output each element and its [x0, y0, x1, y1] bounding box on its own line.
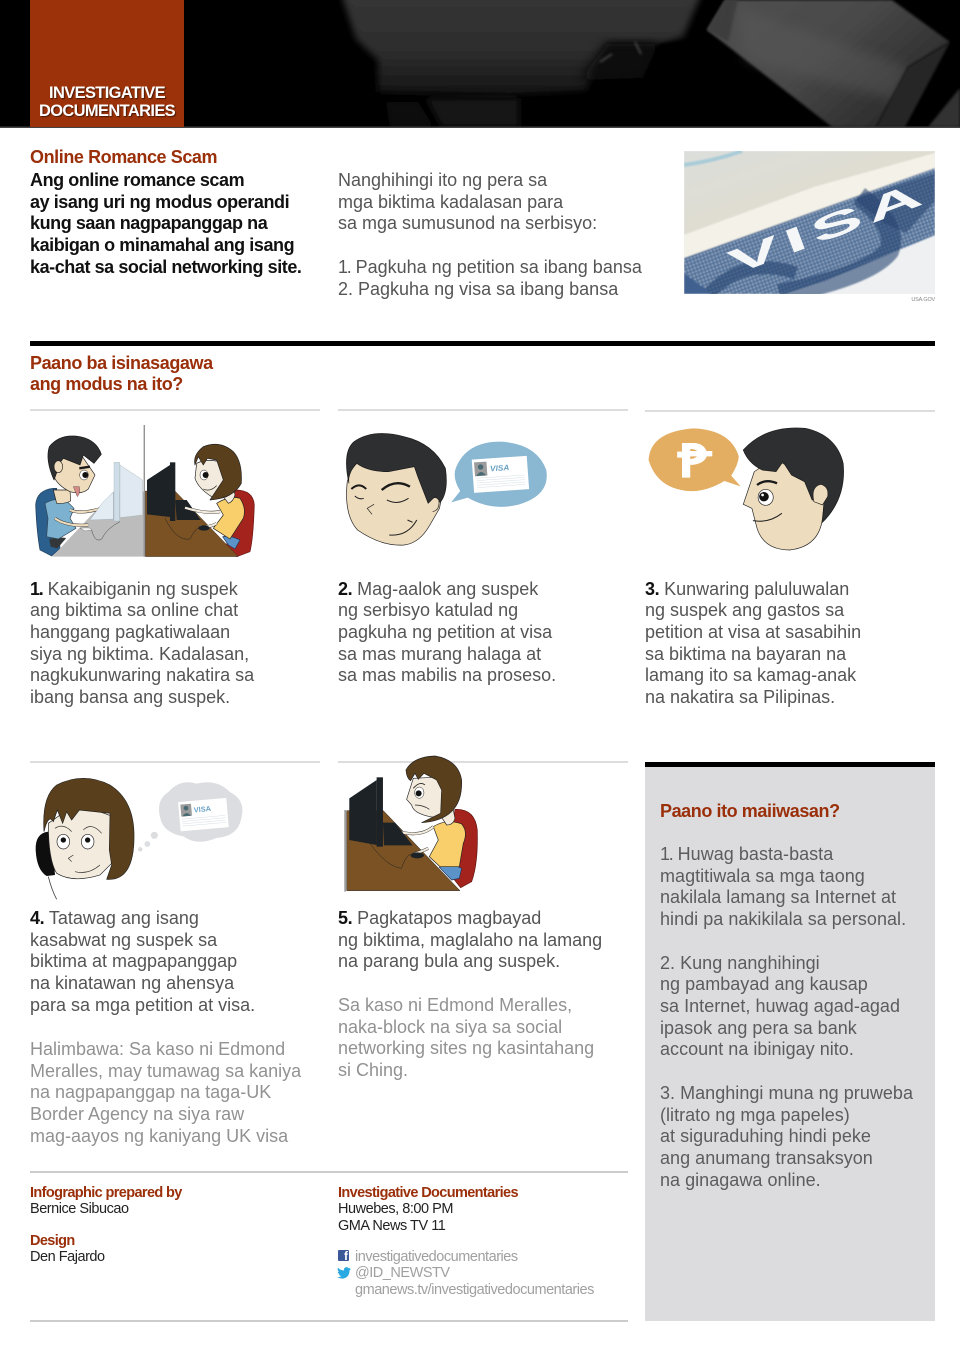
step 4 text: kasabwat ng suspek sa — [30, 930, 217, 950]
step 5 text: na parang bula ang suspek. — [338, 951, 560, 971]
intro definition text: Ang online romance scam — [30, 170, 244, 190]
step 1 text — [30, 578, 254, 707]
step 5 text: ng biktima, maglalaho na lamang — [338, 930, 602, 950]
illustration 4: accomplice on phone imagining visa: VISA — [193, 804, 212, 814]
brand tag: Investigative Documentaries: DOCUMENTARIES — [39, 102, 175, 120]
panel tips list: sa Internet, huwag agad-agad — [660, 996, 900, 1016]
credits: show schedule: Huwebes, 8:00 PM — [338, 1201, 453, 1217]
step 2 text: ng serbisyo katulad ng — [338, 600, 518, 620]
step 2 text — [338, 578, 556, 685]
credits: prepared by — [30, 1185, 182, 1217]
photo credit: USA.GOV — [911, 297, 935, 303]
panel tips list: hindi pa nakikilala sa personal. — [660, 909, 906, 929]
step 4 text — [30, 908, 255, 1015]
credits: design: Den Fajardo — [30, 1249, 105, 1265]
intro services list: sa mga sumusunod na serbisyo: — [338, 213, 597, 233]
step 5 example: networking sites ng kasintahang — [338, 1038, 594, 1058]
brand tag: Investigative Documentaries — [30, 0, 184, 127]
step 1 text: 1. Kakaibiganin ng suspek — [30, 578, 238, 598]
step 5 text — [338, 908, 602, 971]
step 5 example: naka-block na siya sa social — [338, 1017, 562, 1037]
panel tips list — [660, 844, 913, 1190]
intro definition text — [30, 170, 301, 277]
brand tag: Investigative Documentaries: INVESTIGATIVE — [49, 84, 165, 102]
step 3 text — [645, 578, 861, 707]
photo: visa document: VISA — [723, 172, 933, 282]
intro services list: mga biktima kadalasan para — [338, 192, 563, 212]
panel tips list: na ginagawa online. — [660, 1170, 821, 1190]
intro definition text: kung saan nagpapanggap na — [30, 213, 267, 233]
step 1 text: siya ng biktima. Kadalasan, — [30, 644, 249, 664]
icon: facebook — [338, 1250, 349, 1261]
step 3 text: ng suspek ang gastos sa — [645, 600, 844, 620]
panel tips list: account na ibinigay nito. — [660, 1039, 854, 1059]
credits: design: Design — [30, 1233, 75, 1249]
panel tips list: ng pambayad ang kausap — [660, 974, 868, 994]
intro definition text: ka-chat sa social networking site. — [30, 257, 301, 277]
heading: Paano ba isinasagawa: ang modus na ito? — [30, 374, 183, 394]
step 1 text: hanggang pagkatiwalaan — [30, 622, 230, 642]
panel tips list: 3. Manghingi muna ng pruweba — [660, 1083, 913, 1103]
step 2 text: 2. Mag-aalok ang suspek — [338, 578, 538, 598]
icon: twitter — [337, 1267, 351, 1279]
step 3 text: lamang ito sa kamag-anak — [645, 665, 856, 685]
intro definition text: kaibigan o minamahal ang isang — [30, 235, 294, 255]
step 1 text: nagkukunwaring nakatira sa — [30, 665, 254, 685]
intro services list — [338, 170, 642, 299]
step 4 text: biktima at magpapanggap — [30, 951, 237, 971]
heading: Paano ba isinasagawa — [30, 352, 214, 394]
step 2 text: sa mas murang halaga at — [338, 644, 541, 664]
step 4 example: mag-aayos ng kaniyang UK visa — [30, 1126, 288, 1146]
panel tips list: at siguraduhing hindi peke — [660, 1126, 871, 1146]
step 1 text: ang biktima sa online chat — [30, 600, 238, 620]
credits: prepared by: Bernice Sibucao — [30, 1201, 129, 1217]
credits: show schedule — [338, 1185, 518, 1234]
illustration 2: winking suspect with visa speech bubble: VISA — [490, 463, 510, 473]
step 5 example: Sa kaso ni Edmond Meralles, — [338, 995, 572, 1015]
panel tips list: magtitiwala sa mga taong — [660, 866, 865, 886]
panel tips list: (litrato ng mga papeles) — [660, 1105, 850, 1125]
intro services list: 1. Pagkuha ng petition sa ibang bansa — [338, 257, 642, 277]
social links: investigativedocumentaries — [355, 1249, 518, 1265]
step 4 text: para sa mga petition at visa. — [30, 995, 255, 1015]
heading: Paano ba isinasagawa: Paano ba isinasagawa — [30, 352, 213, 372]
step 4 example: na nagpapanggap na taga-UK — [30, 1082, 271, 1102]
social links — [355, 1249, 594, 1298]
step 4 example — [30, 1039, 302, 1146]
step 3 text: na nakatira sa Pilipinas. — [645, 687, 835, 707]
step 4 example: Border Agency na siya raw — [30, 1104, 244, 1124]
step 3 text: sa biktima na bayaran na — [645, 644, 846, 664]
heading: Online Romance Scam: Online Romance Scam — [30, 147, 217, 167]
credits: show schedule: Investigative Documentaries — [338, 1185, 518, 1201]
panel top rule — [645, 762, 935, 767]
step 3 text: petition at visa at sasabihin — [645, 622, 861, 642]
step 5 example — [338, 995, 594, 1080]
header banner photo — [0, 0, 960, 128]
step 1 text: ibang bansa ang suspek. — [30, 687, 230, 707]
intro definition text: ay isang uri ng modus operandi — [30, 192, 289, 212]
step 5 example: si Ching. — [338, 1060, 408, 1080]
credits: design — [30, 1233, 105, 1265]
credits: prepared by: Infographic prepared by — [30, 1185, 182, 1201]
social links: gmanews.tv/investigativedocumentaries — [355, 1282, 594, 1298]
step 2 text: sa mas mabilis na proseso. — [338, 665, 556, 685]
panel tips list: 1. Huwag basta-basta — [660, 844, 833, 864]
step 4 text: 4. Tatawag ang isang — [30, 908, 199, 928]
step 4 example: Halimbawa: Sa kaso ni Edmond — [30, 1039, 285, 1059]
photo: visa document — [684, 151, 935, 294]
panel tips list: ang anumang transaksyon — [660, 1148, 873, 1168]
step 3 text: 3. Kunwaring paluluwalan — [645, 578, 849, 598]
step 4 example: Meralles, may tumawag sa kaniya — [30, 1061, 301, 1081]
credits: show schedule: GMA News TV 11 — [338, 1218, 445, 1234]
section divider — [30, 341, 935, 346]
panel tips list: ipasok ang pera sa bank — [660, 1018, 857, 1038]
step 2 text: pagkuha ng petition at visa — [338, 622, 552, 642]
panel tips list: nakilala lamang sa Internet at — [660, 887, 896, 907]
step 4 text: na kinatawan ng ahensya — [30, 973, 234, 993]
intro services list: 2. Pagkuha ng visa sa ibang bansa — [338, 279, 618, 299]
intro services list: Nanghihingi ito ng pera sa — [338, 170, 547, 190]
step 5 text: 5. Pagkatapos magbayad — [338, 908, 541, 928]
panel heading: Paano ito maiiwasan? — [660, 801, 840, 821]
panel: prevention tips — [645, 762, 935, 1321]
panel tips list: 2. Kung nanghihingi — [660, 953, 820, 973]
social links: @ID_NEWSTV — [355, 1265, 450, 1281]
